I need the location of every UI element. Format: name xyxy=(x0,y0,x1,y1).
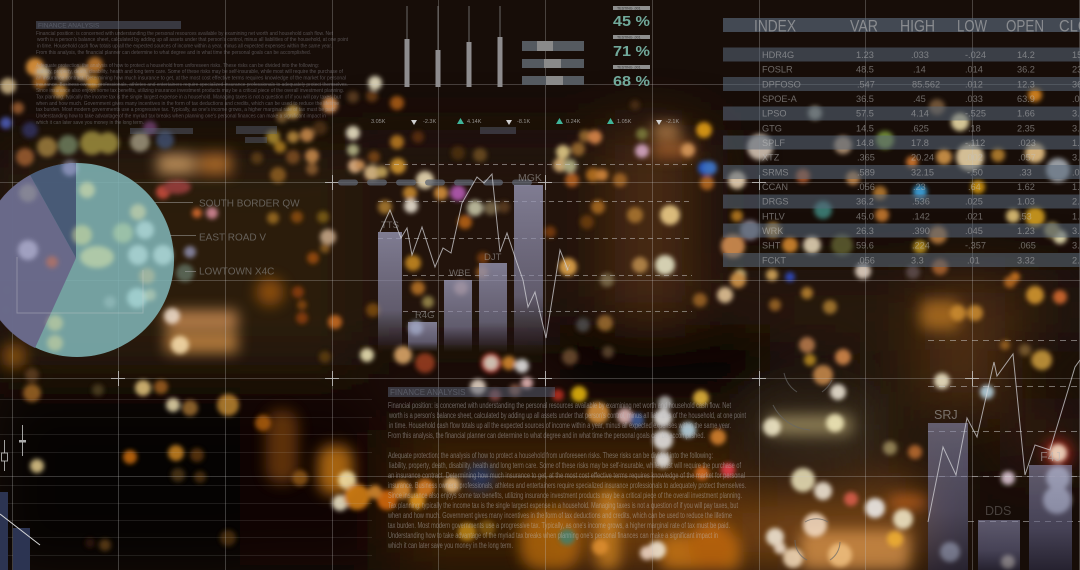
table rows: -.357 xyxy=(965,241,986,251)
table rows: HTLV xyxy=(762,211,786,221)
table rows: 1.03 xyxy=(1017,197,1035,207)
table rows: -.112 xyxy=(965,138,985,148)
percent metrics: TESTING .001 xyxy=(617,65,641,69)
table rows: .057 xyxy=(1018,153,1036,163)
report paragraphs: when and how much. Government gives many incentives in the form of tax deductions and credits, which can be used to reduce the lifetime xyxy=(387,511,732,520)
table rows: FOSLR xyxy=(762,65,793,75)
grid cross markers xyxy=(111,175,979,386)
table rows: DRGS xyxy=(762,197,789,207)
table rows: WRK xyxy=(762,226,784,236)
bar labels: WBF xyxy=(449,268,470,279)
table rows: .056 xyxy=(857,255,875,265)
table rows: 26.3 xyxy=(856,226,874,236)
table rows: .023 xyxy=(1018,138,1036,148)
table header: INDEX xyxy=(754,18,796,36)
panel: bottom-centre report text xyxy=(387,387,747,550)
table rows: .64 xyxy=(968,182,981,192)
table rows xyxy=(762,50,1080,265)
table rows: .536 xyxy=(912,197,930,207)
report paragraphs: when and how much. Government gives many incentives in the form of tax deductions and credits, which can be used to reduce the lifetime xyxy=(36,101,339,107)
table rows: SPOE-A xyxy=(762,94,798,104)
table rows: 14.5 xyxy=(856,123,874,133)
table rows: -.525 xyxy=(965,109,986,119)
report paragraphs: Adequate protection: the analysis of how to protect a household from unforeseen risks. These risks can be divided into the following: xyxy=(36,63,319,69)
table rows: .625 xyxy=(911,123,929,133)
table header xyxy=(754,18,1080,36)
table rows: 36.5 xyxy=(856,94,874,104)
table rows: .021 xyxy=(965,211,983,221)
percent metrics: TESTING .001 xyxy=(617,35,641,39)
ticker row: 3.05K xyxy=(371,119,386,125)
table rows: CCAN xyxy=(762,182,788,192)
report paragraphs: worth is a person's balance sheet, calculated by adding up all assets under that person's control, minus all liabilities of the household, at one point xyxy=(37,37,349,43)
table rows: 45.0 xyxy=(856,211,874,221)
report paragraphs: Financial position: is concerned with understanding the personal resources available by examining net worth and household cash flow. Net xyxy=(388,401,732,410)
ticker row xyxy=(371,118,679,125)
report paragraphs: an insurance contract. Determining how much insurance to get, at the most cost effective terms requires knowledge of the market for personal xyxy=(36,76,346,82)
table rows: .18 xyxy=(968,123,981,133)
progress bars xyxy=(522,41,584,85)
report paragraphs: Financial position: is concerned with understanding the personal resources available by examining net worth and household cash flow. Net xyxy=(36,31,334,37)
pie inner frame xyxy=(17,257,143,313)
ticker row: 4.14K xyxy=(467,119,482,125)
report paragraphs: Since insurance also enjoys some tax benefits, utilizing insurance investment products may be a critical piece of the overall investment planning. xyxy=(36,88,344,94)
pie highlights xyxy=(18,160,173,351)
panel: top-left report text xyxy=(36,21,349,126)
data table xyxy=(723,18,1080,267)
dashed grid: bottom-right chart xyxy=(928,340,1080,522)
table rows: DPFOSO xyxy=(762,79,801,89)
pie legend xyxy=(155,198,300,278)
ticker row: -8.1K xyxy=(517,119,530,125)
report paragraphs: tax burden. Most modern governments use a progressive tax. Typically, as one's income grows, a higher marginal rate of tax must be paid. xyxy=(36,107,336,113)
report paragraphs: which it can later save you money in the long term. xyxy=(387,541,513,550)
table rows: 59.6 xyxy=(856,241,874,251)
report paragraphs: liability, property, death, disability, health and long term care. Some of these risks may be self-insurable, while most will require the purchase of xyxy=(37,69,344,75)
report paragraphs: tax burden. Most modern governments use a progressive tax. Typically, as one's income grows, a higher marginal rate of tax must be paid. xyxy=(388,521,730,530)
table rows: 48.5 xyxy=(856,65,874,75)
table rows: .365 xyxy=(857,153,875,163)
table rows: .056 xyxy=(857,182,875,192)
report paragraphs: Since insurance also enjoys some tax benefits, utilizing insurance investment products may be a critical piece of the overall investment planning. xyxy=(388,491,742,500)
pie legend: SOUTH BORDER QW xyxy=(199,198,300,210)
bar labels: DJT xyxy=(484,252,502,263)
table rows: .53 xyxy=(1019,211,1032,221)
table rows: 3.3 xyxy=(911,255,924,265)
bar chart: middle xyxy=(378,172,571,355)
radial dial arcs xyxy=(773,373,840,560)
table header: LOW xyxy=(957,18,987,36)
table rows: 85.562 xyxy=(912,79,940,89)
table header: HIGH xyxy=(900,18,935,36)
report heading bar xyxy=(388,387,555,397)
line overlay xyxy=(928,354,1080,522)
bar labels xyxy=(381,172,571,321)
table rows: .142 xyxy=(912,211,930,221)
table rows: .224 xyxy=(912,241,930,251)
percent metrics: 68 % xyxy=(613,74,650,90)
table rows: .33 xyxy=(1019,167,1032,177)
report paragraphs: Tax planning: typically the income tax is the single largest expense in a household. Managing taxes is not a question of if you will pay taxes, but xyxy=(388,501,739,510)
table rows: .002 xyxy=(965,153,983,163)
table rows: .390 xyxy=(912,226,930,236)
table rows: -.50 xyxy=(967,167,983,177)
table header: VAR xyxy=(850,18,878,36)
table rows: .14 xyxy=(913,65,926,75)
table rows: 32.15 xyxy=(911,167,934,177)
table rows: SHT xyxy=(762,241,781,251)
report heading bar xyxy=(36,21,181,30)
bar labels: DDS xyxy=(985,504,1011,518)
table rows: .45 xyxy=(913,94,926,104)
pie wedge: purple xyxy=(0,175,76,348)
report paragraphs xyxy=(387,401,747,550)
bars xyxy=(378,185,543,355)
table rows: 1.66 xyxy=(1017,109,1035,119)
report paragraphs: Understanding how to take advantage of the myriad tax breaks when planning one's personal finances can make a significant impact in xyxy=(388,531,718,540)
table rows: 4.14 xyxy=(911,109,929,119)
table rows: 2.35 xyxy=(1017,123,1035,133)
table rows: .065 xyxy=(1018,241,1036,251)
table rows: HDR4G xyxy=(762,50,794,60)
table rows: SRMS xyxy=(762,167,789,177)
table rows: .589 xyxy=(857,167,875,177)
report paragraphs: Tax planning: typically the income tax is the single largest expense in a household. Managing taxes is not a question of if you will pay taxes, but xyxy=(36,94,342,100)
pie legend: LOWTOWN X4C xyxy=(199,266,274,278)
bar labels: R4G xyxy=(415,310,435,321)
table header: OPEN xyxy=(1006,18,1044,36)
table rows: XTZ xyxy=(762,153,780,163)
table rows: .045 xyxy=(965,226,983,236)
bar labels: TTS xyxy=(381,220,399,231)
ticker row: -2.1K xyxy=(666,119,679,125)
table rows: 14.8 xyxy=(856,138,874,148)
table rows: 1.23 xyxy=(1017,226,1035,236)
ticker row: -2.3K xyxy=(423,119,436,125)
report paragraphs: insurance. Business owners, professionals, athletes and entertainers require specialized insurance professionals to adequately protect themselves. xyxy=(388,481,746,490)
line overlay xyxy=(380,174,568,338)
bar labels: V xyxy=(564,263,571,274)
report paragraphs: From this analysis, the financial planner can determine to what degree and in what time the personal goals can be accomplished. xyxy=(388,431,705,440)
table rows: .033 xyxy=(911,50,929,60)
bar labels xyxy=(934,408,1061,518)
percent metrics: 71 % xyxy=(613,44,650,60)
bottom-left mini candles and bars xyxy=(0,425,40,570)
table rows: 12.3 xyxy=(1017,79,1035,89)
table rows: -.024 xyxy=(965,50,986,60)
report heading bar: FINANCE ANALYSIS xyxy=(38,22,100,30)
report paragraphs: in time. Household cash flow totals up all the expected sources of income within a year, minus all expected expenses within the same year. xyxy=(37,44,332,50)
table rows: 63.9 xyxy=(1017,94,1035,104)
bar labels: F4J xyxy=(1040,450,1061,464)
report heading bar: FINANCE ANALYSIS xyxy=(390,388,465,397)
dashed grid: middle chart xyxy=(378,164,692,312)
table rows: 57.5 xyxy=(856,109,874,119)
table rows: SPLF xyxy=(762,138,785,148)
table rows: .012 xyxy=(965,79,983,89)
bar labels: SRJ xyxy=(934,408,958,422)
table rows: 17.8 xyxy=(911,138,929,148)
report paragraphs: worth is a person's balance sheet, calculated by adding up all assets under that person's control, minus all liabilities of the household, at one point xyxy=(388,411,747,420)
table rows: 20.24 xyxy=(911,153,934,163)
bar chart: bottom-right xyxy=(928,354,1080,570)
table rows: 36.2 xyxy=(1017,65,1035,75)
pill markers row xyxy=(338,180,532,186)
ticker row: 1.05K xyxy=(617,119,632,125)
percent metrics: 45 % xyxy=(613,14,650,30)
table rows: .23 xyxy=(913,182,926,192)
small top rows of grey bars xyxy=(130,126,516,143)
percent metrics xyxy=(613,6,650,90)
table rows: LPSO xyxy=(762,109,787,119)
report paragraphs: insurance. Business owners, professionals, athletes and entertainers require specialized insurance professionals to adequately protect themselves. xyxy=(36,82,348,88)
report paragraphs: in time. Household cash flow totals up all the expected sources of income within a year, minus all expected expenses within the same year. xyxy=(389,421,731,430)
table rows: 1.23 xyxy=(856,50,874,60)
candlestick chart: top xyxy=(404,6,502,87)
table rows: .033 xyxy=(965,94,983,104)
report paragraphs: liability, property, death, disability, health and long term care. Some of these risks may be self-insurable, while most will require the purchase of xyxy=(389,461,742,470)
table rows: GTG xyxy=(762,123,782,133)
pie wedge: slate xyxy=(30,163,76,258)
report paragraphs: From this analysis, the financial planner can determine to what degree and in what time the personal goals can be accomplished. xyxy=(36,50,311,56)
pie chart xyxy=(0,160,174,357)
report paragraphs: an insurance contract. Determining how much insurance to get, at the most cost effective terms requires knowledge of the market for personal xyxy=(388,471,745,480)
table rows: 36.2 xyxy=(856,197,874,207)
report paragraphs: which it can later save you money in the long term. xyxy=(36,120,144,126)
table stripes xyxy=(723,18,1080,267)
table rows: .01 xyxy=(967,255,980,265)
percent metrics: TESTING .001 xyxy=(617,6,641,10)
bar labels: MGK xyxy=(518,172,542,184)
report paragraphs xyxy=(36,31,349,126)
table rows: .547 xyxy=(857,79,875,89)
table rows: FCKT xyxy=(762,255,786,265)
ticker row: 0.24K xyxy=(566,119,581,125)
table rows: 14.2 xyxy=(1017,50,1035,60)
table rows: 1.62 xyxy=(1017,182,1035,192)
bars xyxy=(928,423,1072,570)
report paragraphs: Understanding how to take advantage of the myriad tax breaks when planning one's personal finances can make a significant impact in xyxy=(36,114,326,120)
table rows: .014 xyxy=(965,65,983,75)
report paragraphs: Adequate protection: the analysis of how to protect a household from unforeseen risks. These risks can be divided into the following: xyxy=(388,451,713,460)
pie legend: EAST ROAD V xyxy=(199,232,266,244)
table rows: .025 xyxy=(965,197,983,207)
table rows: 3.32 xyxy=(1017,255,1035,265)
